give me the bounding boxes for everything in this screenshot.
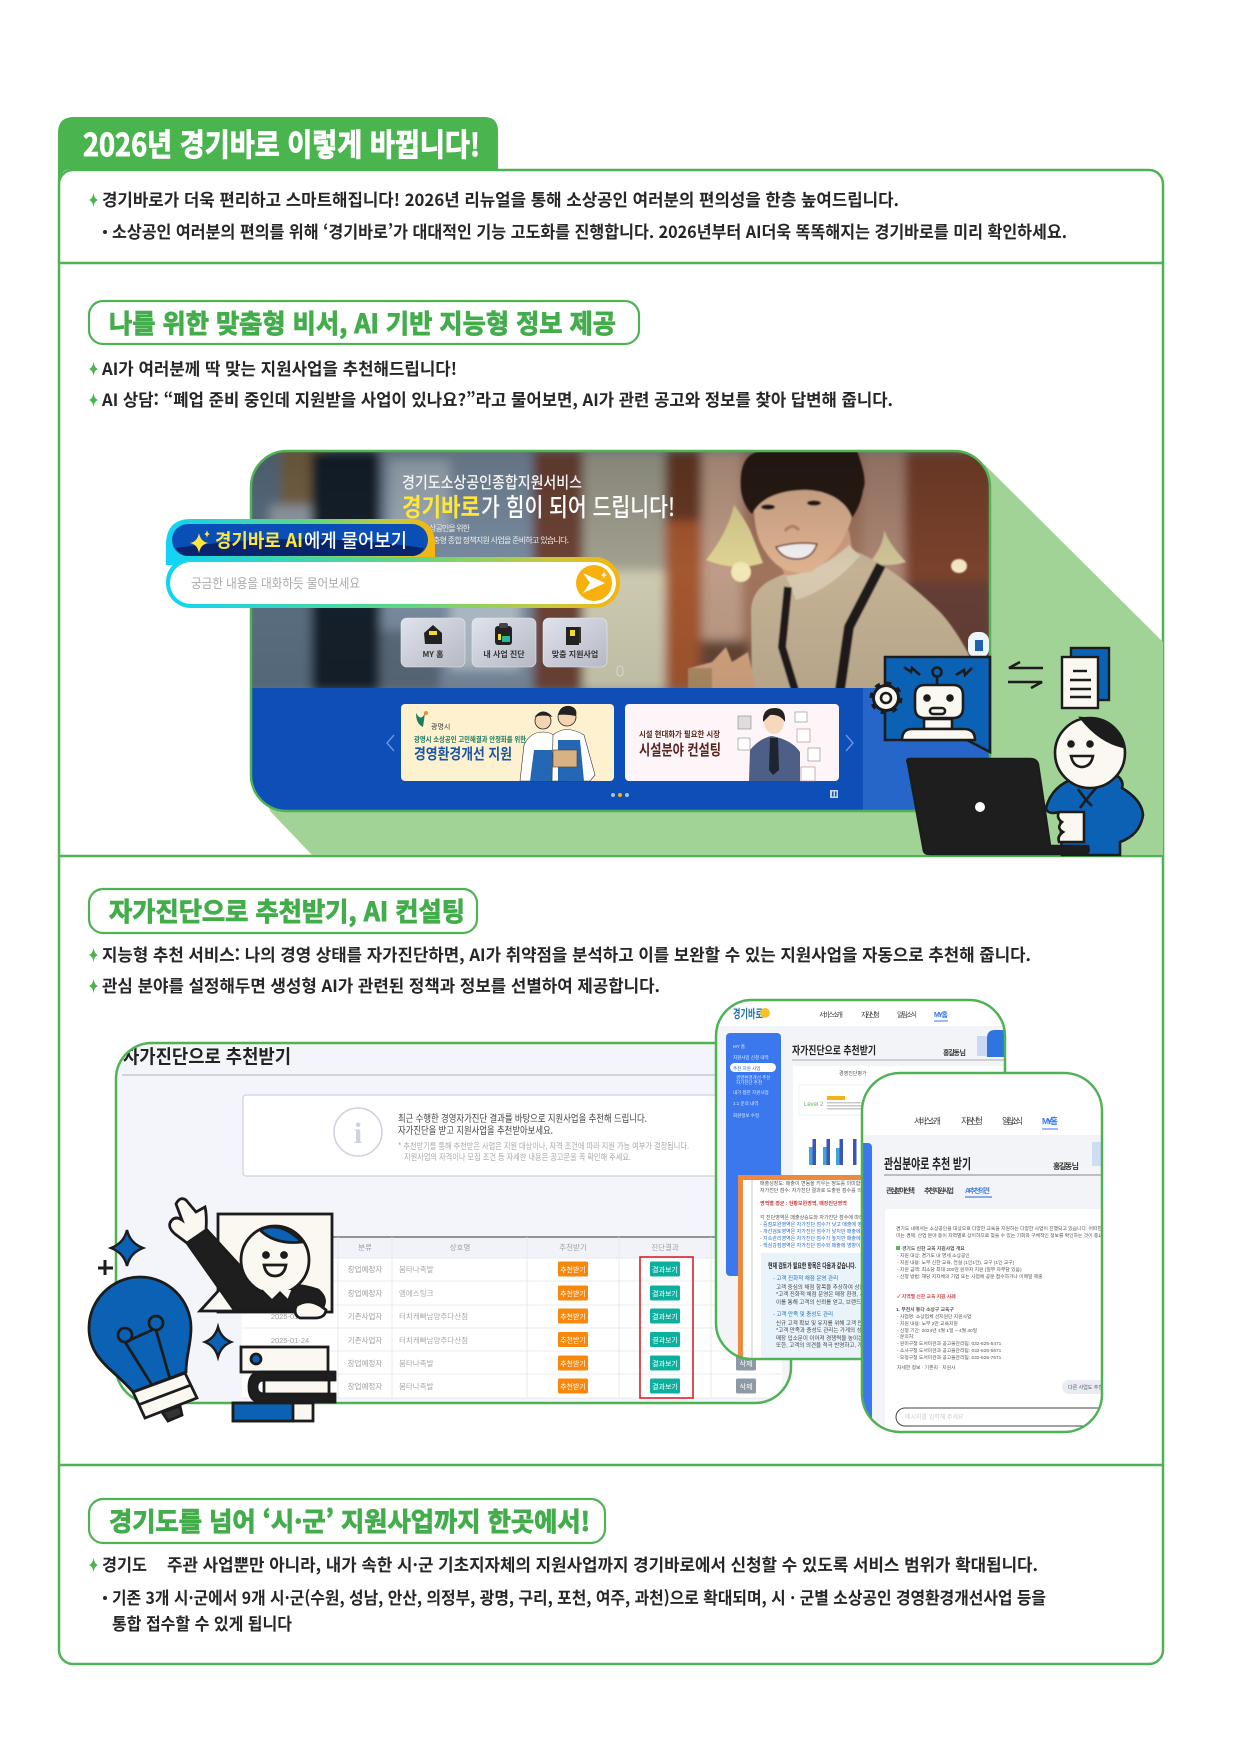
hero headline: 경기바로	[402, 488, 480, 524]
orange report card: - 고객 만족 및 충성도 관리	[773, 1310, 833, 1318]
orange report card: 매출성장도: 매출이 변동을 키우는 정도를 의미합니다.	[760, 1180, 871, 1187]
main frame	[59, 170, 1163, 1664]
results table: 추천받기	[560, 1289, 586, 1298]
panel: dashboard screen: 자가진단 추천	[736, 1079, 762, 1086]
panel: dashboard screen: Level 2	[804, 1102, 824, 1108]
results table: 터치케빠남양주다산점	[399, 1335, 468, 1345]
orange report card: - 지속관리영역은 자가진단 점수가 높지만 매출에 영향이 높은	[760, 1235, 887, 1242]
orange report card: 신규 고객 확보 및 유지를 위해 고객 만족의 지속적	[776, 1319, 889, 1327]
panel: dashboard screen: 홍길동 님	[943, 1048, 966, 1058]
panel: interest-based recommendation screen: 메시지를 입력해 주세요	[905, 1412, 964, 1421]
orange report card: - 개선검토영역은 자가진단 점수가 낮지만 매출에 영향이 적은	[760, 1228, 887, 1235]
hero headline: 충형 종합 정책지원 사업을 준비하고 있습니다.	[433, 535, 569, 546]
section 3 text: 기존 3개 시·군에서 9개 시·군(수원, 성남, 안산, 의정부, 광명, 구리, 포천, 여주, 과천)으로 확대되며, 시 · 군별 소상공인 경영환경개선사업 등을	[112, 1584, 1046, 1609]
orange report card: - 중점보완영역은 자가진단 점수가 낮고 매출에 영향이 높은	[760, 1221, 882, 1228]
results table: 추천받기	[559, 1242, 587, 1252]
results table: 기존사업자	[348, 1312, 382, 1321]
results table: 창업예정자	[348, 1381, 382, 1391]
results table: 결과보기	[652, 1265, 678, 1274]
intro text block	[89, 186, 1067, 243]
banner: 광명시: 경영환경개선 지원	[414, 743, 512, 764]
quick menu buttons	[401, 618, 623, 676]
results table: 2025-01-24	[271, 1312, 309, 1321]
notice box: i	[354, 1117, 362, 1150]
panel: interest-based recommendation screen: 추천 지원 사업	[924, 1186, 954, 1195]
results table: 삭제	[740, 1359, 752, 1369]
section 3 text: 주관 사업뿐만 아니라, 내가 속한 시·군 기초지자체의 지원사업까지 경기바로에서 신청할 수 있도록 서비스 범위가 확대됩니다.	[167, 1551, 1038, 1576]
banner: 광명시: 광명시	[431, 722, 450, 732]
panel: dashboard screen: MY 홈	[934, 1010, 949, 1019]
banner: 광명시: 광명시 소상공인 고민해결과 안정화를 위한	[414, 734, 526, 745]
panel: dashboard screen: 추천 지원 사업	[733, 1065, 760, 1072]
results table: 붐타나족발	[399, 1359, 434, 1368]
results table: 상호명	[450, 1242, 470, 1252]
results table: 엠에스팅크	[399, 1288, 434, 1298]
results table: 분류	[358, 1243, 372, 1252]
section 2 heading: 자가진단으로 추천받기, AI 컨설팅	[109, 892, 465, 929]
results table: 추천받기	[560, 1265, 586, 1274]
section 2 text: 지능형 추천 서비스: 나의 경영 상태를 자가진단하면, AI가 취약점을 분석하고 이를 보완할 수 있는 지원사업을 자동으로 추천해 줍니다.	[102, 941, 1031, 966]
panel: interest-based recommendation screen: - 소사구청 도서미관과 공고물관리팀: 032-625-5671	[897, 1347, 1002, 1354]
intro text block: 소상공인 여러분의 편의를 위해 ‘경기바로’가 대대적인 기능 고도화를 진행합니다. 2026년부터 AI더욱 똑똑해지는 경기바로를 미리 확인하세요.	[112, 218, 1067, 243]
panel: dashboard screen: 서비스 소개	[819, 1010, 843, 1019]
results table: 추천받기	[560, 1382, 586, 1391]
icon: documents	[1062, 648, 1109, 708]
panel: interest-based recommendation screen: 다른 사업도 추천해줘	[1068, 1384, 1112, 1391]
section 1 heading: 나를 위한 맞춤형 비서, AI 기반 지능형 정보 제공	[109, 304, 616, 341]
hero headline: 상공인을 위한	[429, 523, 471, 534]
results table: 결과보기	[652, 1312, 678, 1321]
panel: self-diagnosis recommendation screen	[116, 1042, 803, 1403]
results table: 삭제	[740, 1382, 752, 1392]
results table: 추천받기	[560, 1336, 586, 1344]
quick menu buttons: MY 홈	[422, 649, 444, 660]
section 3 text: 경기도	[102, 1551, 147, 1576]
results table: 기존사업자	[348, 1336, 382, 1345]
orange report card: 이를 통해 고객의 신뢰를 얻고, 브랜드 충성도를	[776, 1298, 883, 1306]
section 2 text	[89, 941, 1031, 997]
results table: 터치케빠남양주다산점	[399, 1311, 468, 1321]
orange report card: *고객 만족과 충성도 관리는 가게의 성공과 장기적	[776, 1326, 889, 1334]
orange report card: 고객 중심의 채점 항목을 추상하여 상품과 서비스	[776, 1283, 886, 1291]
orange report card: 현재 검토가 필요한 항목은 다음과 같습니다.	[768, 1261, 856, 1270]
banner: 시설분야 컨설팅: 시설분야 컨설팅	[639, 739, 721, 760]
results table: 붐타나족발	[399, 1382, 434, 1391]
orange report card: - 고객 진화적 채점 운영 관리	[773, 1274, 838, 1282]
section 3 text: 통합 접수할 수 있게 됩니다	[112, 1610, 292, 1635]
panel: interest-based recommendation screen: 홍길동 님	[1053, 1161, 1079, 1172]
panel: interest-based recommendation screen: - 신청 기간: 2024년 4월 1일 ~ 4월 30일	[897, 1327, 977, 1334]
section 3 heading: 경기도를 넘어 ‘시·군’ 지원사업까지 한곳에서!	[109, 1502, 590, 1539]
hero headline: 경기도소상공인종합지원서비스	[402, 469, 582, 493]
panel: interest-based recommendation screen: - 원미구청 도서미관과 공고물관리팀: 032-625-5471	[897, 1340, 1002, 1347]
panel: interest-based recommendation screen: 1. 부천시 통다 소상구 교육구	[896, 1306, 954, 1313]
orange report card: 자가진단 점수: 자가진단 결과로 도출된 점수를 의미합니다.	[760, 1187, 882, 1194]
website hero screenshot	[166, 445, 995, 811]
hero headline	[402, 469, 675, 546]
infographic page	[58, 117, 1164, 1666]
quick menu buttons: 내 사업 진단	[483, 649, 525, 660]
icon: sparkles	[98, 1230, 231, 1357]
panel: interest-based recommendation screen: 관심분야로 추천 받기	[884, 1154, 971, 1174]
notice box	[242, 1094, 715, 1177]
results table: 창업예정자	[348, 1358, 382, 1368]
panel: interest-based recommendation screen: - 지원 내용: 노무 2만 교육지원	[897, 1320, 958, 1327]
quick menu buttons: 맞춤 지원사업	[552, 649, 598, 660]
panel: interest-based recommendation screen: 미는 경제, 산업 분야 등이 지역별로 상이하므로 찾을 수 있는 기회와 구체적인 정보를 확인하는 것이 중요합니다.	[896, 1232, 1117, 1239]
panel: interest-based recommendation screen: 지원 신청	[961, 1116, 983, 1126]
panel: dashboard screen: MY 홈	[733, 1043, 745, 1049]
panel: interest-based recommendation screen: 경기도 내에서는 소상공인을 대상으로 다양한 교육을 지원하는 다양한 사업이 진행되고 있습니다. 어떠한 사업들은 각 시군구 단위로 운영되어, 이	[896, 1225, 1182, 1232]
panel: interest-based recommendation screen: 경기도 신한 교육 지원사업 개요	[902, 1245, 965, 1252]
AI search box: 경기바로 AI	[215, 526, 303, 553]
banner: 시설분야 컨설팅: 시설 현대화가 필요한 시장	[639, 729, 721, 740]
notice box: 지원사업의 자격이나 모집 조건 등 자세한 내용은 공고문을 꼭 확인해 주세요.	[404, 1151, 631, 1163]
title tab: 2026년 경기바로 이렇게 바뀝니다!	[83, 120, 480, 165]
panel: dashboard screen: 자가진단으로 추천받기	[792, 1042, 876, 1058]
panel: dashboard screen: 경기바로	[733, 1005, 763, 1022]
title tab	[58, 117, 498, 182]
section 3 text	[89, 1551, 1046, 1635]
panel: dashboard screen: 1:1 문의 내역	[733, 1100, 758, 1107]
panel: interest-based recommendation screen	[860, 1072, 1104, 1434]
results table: 추천받기	[560, 1359, 586, 1368]
panel: dashboard screen: 내가 찜한 지원사업	[733, 1089, 769, 1096]
icon: stack of books	[233, 1347, 335, 1421]
banner: 시설분야 컨설팅	[625, 704, 839, 781]
panel: dashboard screen: 지원사업 신청 내역	[733, 1054, 769, 1061]
orange report card: 각 진단영역은 매출상승도와 자가진단 점수에 따라 위치가 결정	[760, 1214, 889, 1221]
AI search box	[166, 519, 620, 608]
panel: interest-based recommendation screen: 서비스 소개	[914, 1116, 941, 1126]
orange report card	[738, 1175, 861, 1358]
results table: 붐타나족발	[399, 1265, 434, 1274]
results table: 2025-01-24	[271, 1336, 309, 1345]
panel: interest-based recommendation screen: - 신청 방법: 해당 지자체의 기업 또는 사업에 공문 접수하거나 이메일 제출	[897, 1273, 1043, 1280]
orange report card: *고객 진화적 채점 운영은 매장 환경, 서비스 품질	[776, 1290, 887, 1298]
results table: 결과보기	[652, 1336, 678, 1344]
icon: person pointing up	[170, 1199, 332, 1318]
panel: interest-based recommendation screen: - 오정구청 도서미관과 공고물관리팀: 032-625-7671	[897, 1354, 1002, 1361]
panel: interest-based recommendation screen: AI 추천의견	[965, 1186, 990, 1195]
banner: 광명시	[401, 704, 614, 781]
panel: dashboard screen: 회원정보 수정	[733, 1112, 759, 1119]
arrow: exchange arrows	[1008, 662, 1043, 688]
green background shape	[251, 465, 1163, 855]
panel: interest-based recommendation screen: - 지원 대상: 경기도 내 영세 소상공인	[897, 1252, 970, 1259]
panel: interest-based recommendation screen: ✓ 지역별 신한 교육 지원 사례	[897, 1293, 956, 1300]
notice box: 자가진단을 받고 지원사업을 추천받아보세요.	[398, 1122, 553, 1137]
results table: 결과보기	[652, 1359, 678, 1368]
panel: interest-based recommendation screen: - 지원 금액: 최소당 최대 200만 원까지 지원 (일부 자부담 있음)	[897, 1266, 1022, 1273]
panel: interest-based recommendation screen: 알림소식	[1002, 1116, 1023, 1126]
orange report card: 매장 입소문이 이어져 경쟁력을 높이는 데 크게	[776, 1334, 881, 1342]
icon: person with laptop	[907, 718, 1143, 855]
panel: dashboard screen: 경영진단평가	[839, 1070, 867, 1077]
section 1 text: AI 상담: “폐업 준비 중인데 지원받을 사업이 있나요?”라고 물어보면, AI가 관련 공고와 정보를 찾아 답변해 줍니다.	[101, 386, 893, 411]
results table: 창업예정자	[348, 1288, 382, 1298]
panel: interest-based recommendation screen: - 문의처:	[897, 1333, 915, 1340]
results table: 결과보기	[652, 1382, 678, 1391]
hero headline: 가 힘이 되어 드립니다!	[481, 488, 675, 524]
panel: dashboard screen: 경영환경개선 추천	[736, 1074, 770, 1081]
panel: interest-based recommendation screen: - 지원 내용: 노무 신한 교육, 컨설 (1인1건), 교구 (1인 교구)	[897, 1259, 1015, 1266]
panel: interest-based recommendation screen: 관심분야 선택	[886, 1186, 915, 1195]
results table: 진단결과	[651, 1242, 679, 1252]
notice box: * 추천받기를 통해 추천받은 사업은 지원 대상이나, 자격 조건에 따라 지원 가능 여부가 결정됩니다.	[398, 1140, 689, 1152]
AI search box: 궁금한 내용을 대화하듯 물어보세요	[191, 573, 360, 592]
AI search box: 에게 물어보기	[304, 526, 407, 553]
panel: interest-based recommendation screen: 자세한 정보 · 기존지 · 지원사	[897, 1364, 956, 1371]
carousel controls	[387, 632, 989, 798]
orange report card: 영역별 평균 : 현황보완영역, 매장진단영역	[760, 1200, 847, 1207]
results table: 결과보기	[652, 1289, 678, 1298]
panel: interest-based recommendation screen: - 사업명: 소상업체 선지원단 지원사업	[897, 1313, 971, 1320]
section 2 text: 관심 분야를 설정해두면 생성형 AI가 관련된 정책과 정보를 선별하여 제공합니다.	[102, 972, 660, 997]
notice box: 최근 수행한 경영자가진단 결과를 바탕으로 지원사업을 추천해 드립니다.	[398, 1110, 647, 1125]
section 1 text: AI가 여러분께 딱 맞는 지원사업을 추천해드립니다!	[101, 355, 457, 380]
icon: robot chat bubble	[872, 657, 990, 752]
panel: interest-based recommendation screen: MY 홈	[1042, 1116, 1058, 1126]
results table	[242, 1237, 782, 1398]
orange report card: 또한, 고객의 의견을 적극 반영하고, 개인화된	[776, 1341, 878, 1349]
panel: dashboard screen: 지원 신청	[861, 1010, 880, 1019]
icon: light bulb	[89, 1277, 197, 1421]
section 1 text	[89, 355, 893, 411]
panel: dashboard screen: 알림소식	[897, 1010, 917, 1019]
results table: 추천받기	[560, 1312, 586, 1321]
intro text block: 경기바로가 더욱 편리하고 스마트해집니다! 2026년 리뉴얼을 통해 소상공인 여러분의 편의성을 한층 높여드립니다.	[102, 186, 899, 211]
panel: self-diagnosis recommendation screen: 자가진단으로 추천받기	[123, 1042, 291, 1069]
results table: 창업예정자	[348, 1264, 382, 1274]
orange report card: - 핵심강점영역은 자가진단 점수와 매출에 영향이 높은 항목	[760, 1242, 882, 1249]
panel: dashboard screen	[716, 1000, 1005, 1365]
